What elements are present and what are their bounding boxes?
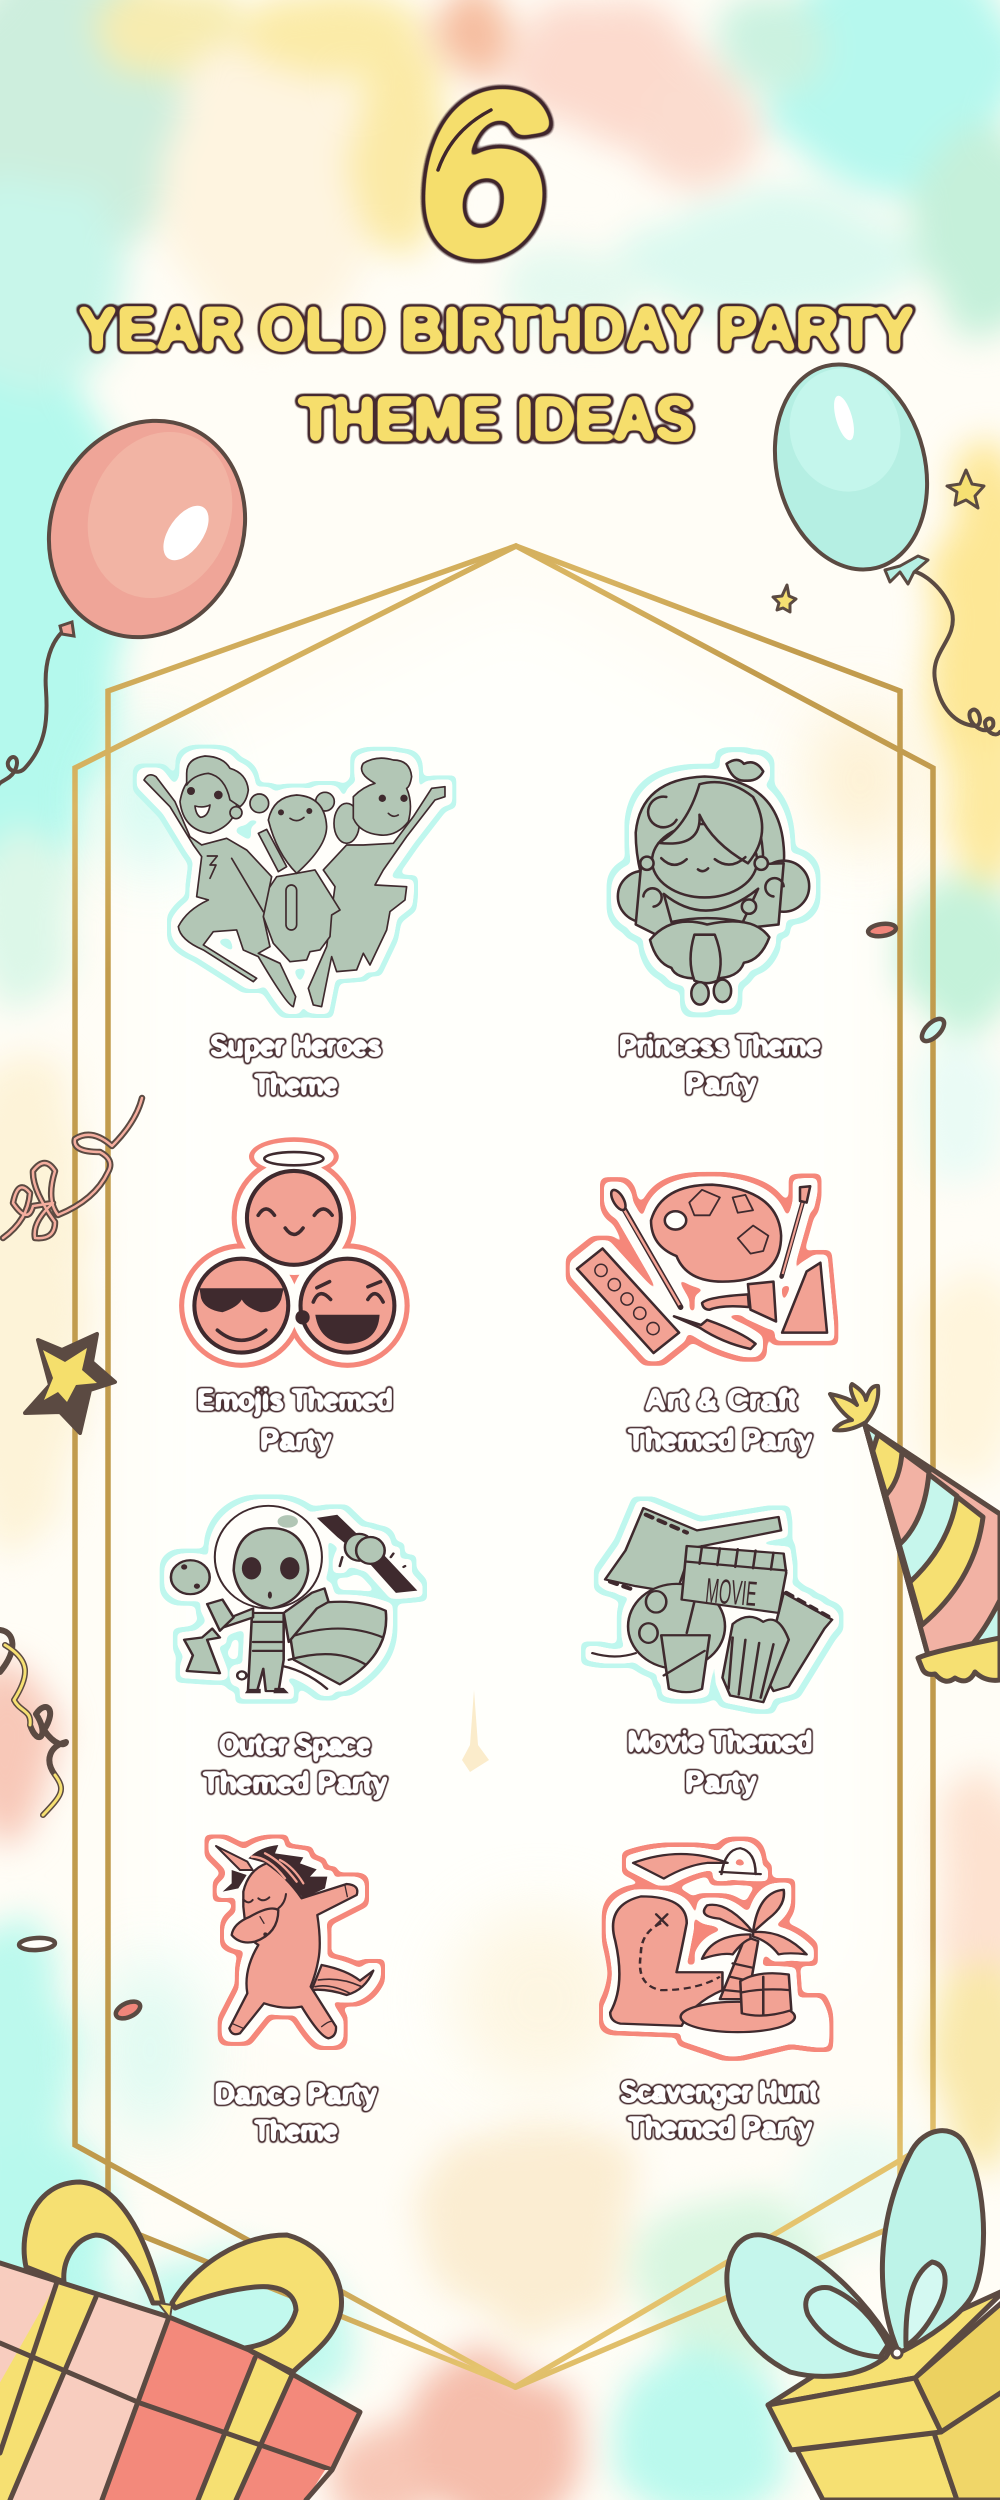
sticker: princess [618,760,809,1005]
caption: Scavenger Hunt [620,2074,818,2109]
caption [214,2076,378,2148]
sticker: unicorn [216,1845,373,2038]
caption: Party [685,1066,758,1101]
panel: Movie Themed Party [592,1508,832,1799]
caption [628,1382,813,1457]
gift right bow [727,2131,984,2376]
caption: Super Heroes [210,1028,382,1063]
caption [202,1727,388,1800]
title text [78,295,914,453]
caption: Party [260,1422,333,1457]
streamer: yellow left [0,1630,66,1815]
gift right box [768,2290,1000,2500]
gift left box [0,2266,357,2500]
caption [628,1724,812,1799]
panel: Scavenger Hunt Themed Party [610,1848,823,2145]
caption: Movie Themed [628,1724,812,1759]
caption: Princess Theme [619,1028,821,1063]
title text: YEAR OLD BIRTHDAY PARTY [78,295,914,363]
panel: Dance Party Theme [214,1845,378,2148]
caption: Party [685,1764,758,1799]
confetti ovals [19,922,948,2022]
sticker: super heroes [144,756,445,1007]
panel: Super Heroes Theme [144,756,445,1102]
sticker: movie: MOVIE [704,1571,759,1613]
gift left bow [24,2182,342,2372]
panel: Princess Theme Party [618,760,821,1101]
gift: right [727,2131,1000,2500]
caption [620,2074,818,2145]
caption: Theme [254,1067,338,1102]
caption: Themed Party [628,2110,813,2145]
gift: left [0,2182,400,2500]
caption [197,1382,393,1457]
caption: Theme [254,2113,338,2148]
sticker: alien astronaut [171,1506,417,1693]
caption: Themed Party [202,1765,388,1800]
title numeral 6: 6 [417,45,548,304]
caption: Themed Party [628,1422,813,1457]
caption [619,1028,821,1101]
streamer: pink left [3,1098,142,1238]
title text: THEME IDEAS [298,385,694,453]
panel: Art & Craft Themed Party [577,1185,827,1457]
sticker: treasure map and palm [610,1848,823,2050]
icon: small stars top right [773,470,984,612]
caption: Art & Craft [644,1382,798,1417]
panel: Emojis Themed Party [179,1137,410,1457]
balloon: red left [0,391,277,790]
caption: Emojis Themed [197,1382,393,1417]
caption: Outer Space [219,1727,371,1762]
balloon: teal right [754,348,1000,734]
panel: Outer Space Themed Party [171,1506,417,1800]
interior wash [140,600,870,2120]
caption [210,1028,382,1102]
gold geometric frames [75,546,933,2387]
sticker: movie [592,1508,832,1702]
caption: Dance Party [214,2076,378,2111]
sticker: emojis [179,1137,410,1368]
party hat right [830,1384,1000,1681]
icon: dark yellow star left [25,1334,115,1433]
sticker: art and craft [577,1185,827,1353]
